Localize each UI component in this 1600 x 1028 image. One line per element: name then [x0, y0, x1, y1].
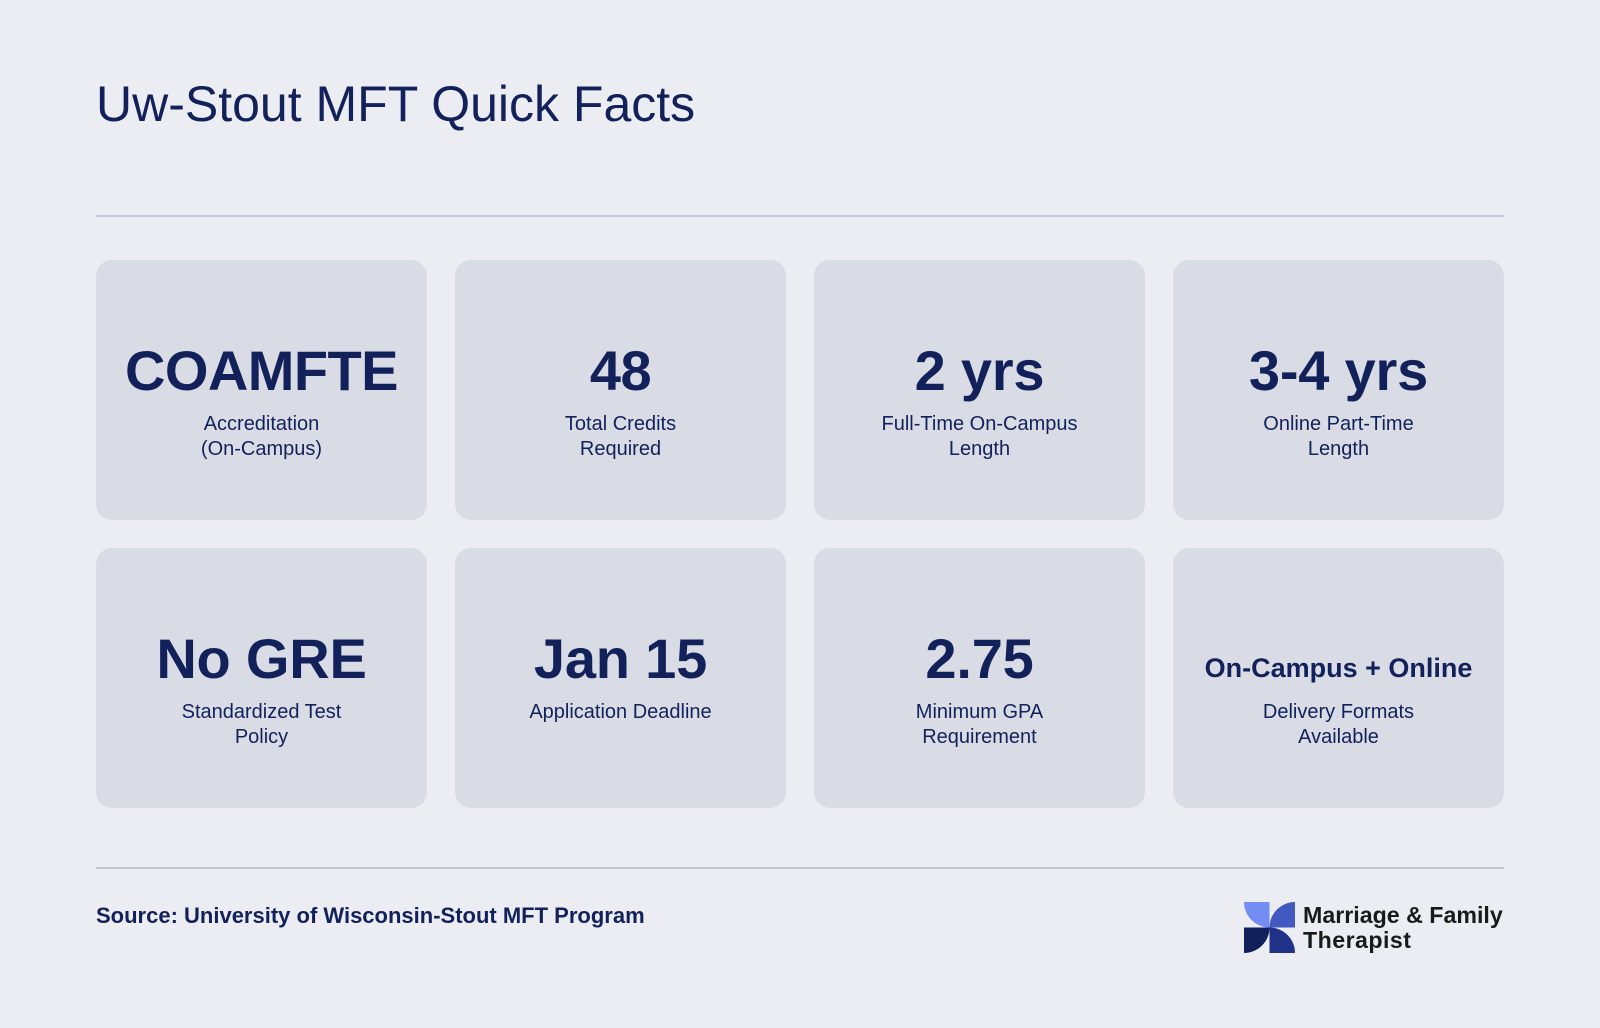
- label: online length: [1263, 413, 1414, 460]
- value: On-Campus + Online: On-Campus + Online: [1205, 653, 1472, 683]
- panel: full-time length: [814, 260, 1145, 520]
- label: accreditation: [201, 413, 322, 460]
- panel: test policy: [96, 548, 427, 808]
- logo wordmark: Marriage & Family: [1303, 902, 1503, 928]
- label: total credits: [565, 413, 676, 460]
- value: COAMFTE: COAMFTE: [125, 339, 398, 402]
- panel: delivery formats: [1173, 548, 1504, 808]
- label: full-time length: [882, 413, 1077, 460]
- logo wordmark: [1303, 902, 1503, 953]
- label: accreditation: Accreditation: [204, 413, 319, 435]
- label: minimum GPA: [916, 701, 1044, 748]
- title: Uw-Stout MFT Quick Facts: [96, 76, 695, 132]
- panel: minimum GPA: [814, 548, 1145, 808]
- label: delivery formats: [1263, 701, 1414, 748]
- logo: [1244, 902, 1503, 953]
- label: delivery formats: Available: [1298, 726, 1379, 748]
- value: 48: 48: [590, 339, 651, 402]
- label: test policy: Policy: [235, 726, 288, 748]
- label: online length: Length: [1308, 438, 1369, 460]
- label: total credits: Total Credits: [565, 413, 676, 435]
- panel: total credits: [455, 260, 786, 520]
- label: test policy: Standardized Test: [182, 701, 341, 723]
- label: full-time length: Length: [949, 438, 1010, 460]
- value: Jan 15: Jan 15: [534, 627, 707, 690]
- logo wordmark: Therapist: [1303, 927, 1411, 953]
- label: minimum GPA: Minimum GPA: [916, 701, 1043, 723]
- label: total credits: Required: [580, 438, 661, 460]
- source note: Source: University of Wisconsin-Stout MFT Program: [96, 903, 645, 928]
- label: accreditation: (On-Campus): [201, 438, 322, 460]
- label: online length: Online Part-Time: [1263, 413, 1414, 435]
- value: 2.75: 2.75: [925, 627, 1034, 690]
- panel: online length: [1173, 260, 1504, 520]
- label: test policy: [182, 701, 342, 748]
- label: full-time length: Full-Time On-Campus: [882, 413, 1077, 435]
- value: 3-4 yrs: 3-4 yrs: [1249, 339, 1428, 402]
- icon: pinwheel: [1244, 902, 1295, 953]
- panel: accreditation: [96, 260, 427, 520]
- label: minimum GPA: Requirement: [922, 726, 1037, 748]
- value: 2 yrs: 2 yrs: [915, 339, 1044, 402]
- label: delivery formats: Delivery Formats: [1263, 701, 1414, 723]
- value: No GRE: No GRE: [156, 627, 367, 690]
- panel: deadline: [455, 548, 786, 808]
- label: deadline: Application Deadline: [529, 701, 712, 723]
